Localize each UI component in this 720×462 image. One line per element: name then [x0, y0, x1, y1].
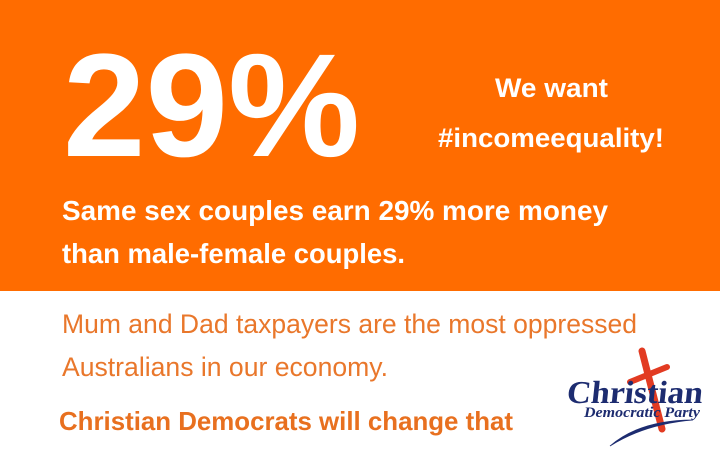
body text: Australians in our economy. [62, 352, 388, 382]
statement text: Same sex couples earn 29% more money [62, 195, 608, 226]
body text [62, 309, 637, 382]
panel: orange banner [0, 0, 720, 291]
icon: red cross [630, 351, 667, 429]
logo wordmark: Christian [565, 374, 705, 410]
call to action: Christian Democrats will change that [59, 406, 513, 436]
panel: white lower section [0, 291, 720, 462]
statement text [62, 195, 608, 269]
body text: Mum and Dad taxpayers are the most oppressed [62, 309, 637, 339]
logo swoosh [610, 420, 693, 446]
slogan: We want: We want [495, 73, 608, 103]
statement text: than male-female couples. [62, 238, 405, 269]
slogan: hashtag: #incomeequality! [438, 123, 664, 153]
logo subtitle: Democratic Party [583, 405, 701, 421]
logo: Christian Democratic Party [565, 351, 705, 446]
big statistic: 29%: 29% [63, 24, 360, 188]
